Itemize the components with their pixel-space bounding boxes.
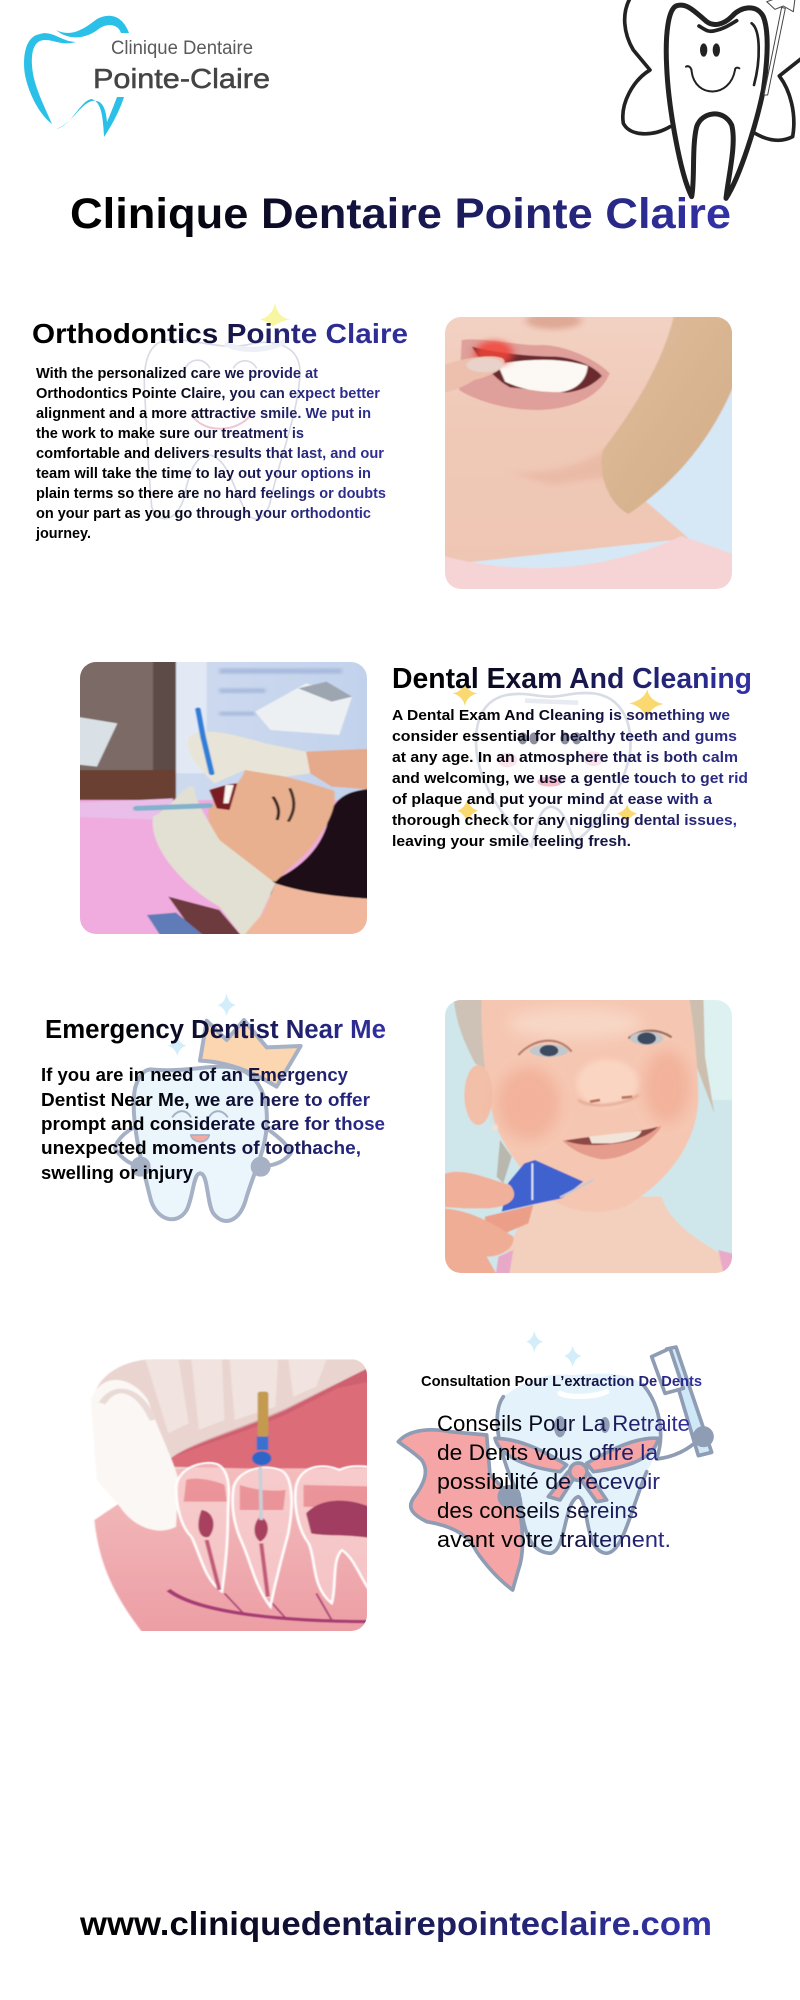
logo text top: Clinique Dentaire xyxy=(111,38,253,59)
watermark: faint tooth with yellow stars xyxy=(453,682,663,847)
body text xyxy=(41,1064,385,1183)
title: Clinique Dentaire Pointe Claire xyxy=(70,190,731,238)
body text: comfortable and delivers results that last, and our xyxy=(36,446,384,462)
logo: Clinique Dentaire Pointe-Claire xyxy=(24,16,270,137)
body text: plain terms so there are no hard feelings or doubts xyxy=(36,486,386,502)
body text: alignment and a more attractive smile. We put in xyxy=(36,406,371,422)
body text: Dentist Near Me, we are here to offer xyxy=(41,1089,370,1110)
body text: of plaque and put your mind at ease with a xyxy=(392,791,713,808)
body text: consider essential for healthy teeth and gums xyxy=(392,728,737,745)
panel: dental exam and cleaning xyxy=(66,653,752,940)
panel: orthodontics xyxy=(32,303,745,600)
body text: des conseils sereins xyxy=(437,1498,638,1523)
body text xyxy=(437,1411,690,1552)
body text: avant votre traitement. xyxy=(437,1527,671,1552)
body text: Conseils Pour La Retraite xyxy=(437,1411,690,1436)
watermark: tooth with cape, bow and toothbrush xyxy=(398,1331,712,1590)
body text: de Dents vous offre la xyxy=(437,1440,659,1465)
photo: root canal illustration xyxy=(92,1359,367,1631)
photo: dentist examining patient xyxy=(80,662,367,934)
body text: swelling or injury xyxy=(41,1162,194,1183)
body text: journey. xyxy=(35,526,91,542)
body text: With the personalized care we provide at xyxy=(36,366,318,382)
body text: possibilité de recevoir xyxy=(437,1469,660,1494)
body text: A Dental Exam And Cleaning is something we xyxy=(392,707,730,724)
body text: leaving your smile feeling fresh. xyxy=(392,833,631,850)
body text: and welcoming, we use a gentle touch to get rid xyxy=(392,770,748,787)
body text: thorough check for any niggling dental issues, xyxy=(392,812,737,829)
body text xyxy=(35,366,386,542)
icon: cyan tooth outline xyxy=(24,16,129,137)
watermark: faint tooth with star xyxy=(144,303,300,519)
body text: on your part as you go through your orthodontic xyxy=(36,506,371,522)
watermark: tooth with crown xyxy=(115,993,301,1221)
body text: prompt and considerate care for those xyxy=(41,1113,385,1134)
photo: child holding retainer xyxy=(438,993,738,1280)
panel: emergency dentist xyxy=(41,993,738,1280)
icon: fairy tooth mascot xyxy=(623,0,800,198)
heading: Dental Exam And Cleaning xyxy=(392,663,752,695)
body text xyxy=(392,707,748,850)
panel: consultation for extraction xyxy=(77,1331,712,1637)
logo text bottom: Pointe-Claire xyxy=(93,63,270,94)
heading: Orthodontics Pointe Claire xyxy=(32,318,408,349)
body text: team will take the time to lay out your options in xyxy=(36,466,371,482)
body text: unexpected moments of toothache, xyxy=(41,1137,361,1158)
body text: Orthodontics Pointe Claire, you can expect better xyxy=(36,386,380,402)
heading: Consultation Pour L’extraction De Dents xyxy=(421,1373,702,1390)
footer website address: www.cliniquedentairepointeclaire.com xyxy=(79,1905,712,1942)
photo: woman touching gum xyxy=(445,317,732,589)
body text: at any age. In an atmosphere that is both calm xyxy=(392,749,738,766)
heading: Emergency Dentist Near Me xyxy=(45,1016,386,1044)
body text: If you are in need of an Emergency xyxy=(41,1064,349,1085)
body text: the work to make sure our treatment is xyxy=(36,426,304,442)
